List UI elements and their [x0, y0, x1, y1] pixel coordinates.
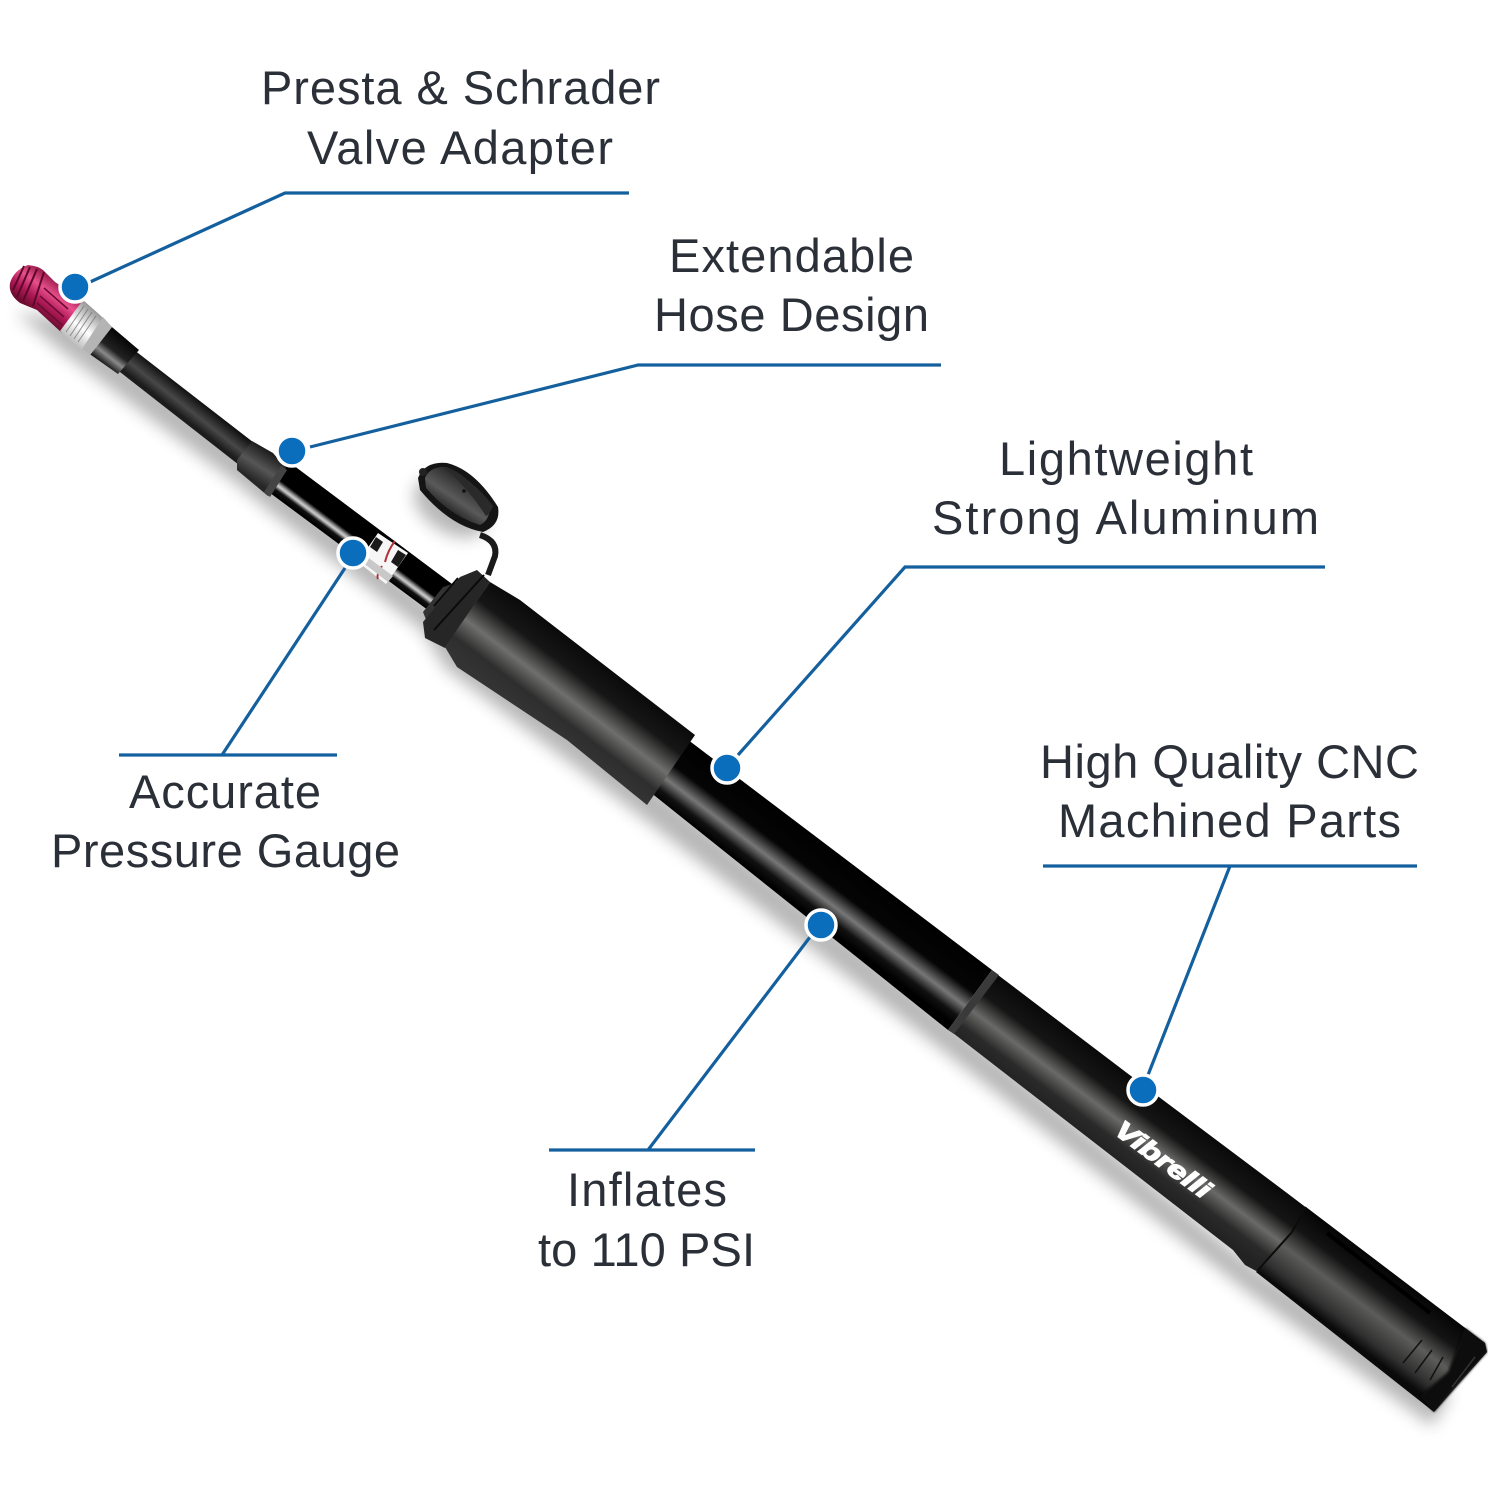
leader line: valve adapter [90, 193, 629, 282]
dust cap strap [480, 535, 495, 575]
label: 110 PSI [538, 1163, 755, 1276]
label: extendable hose: Extendable [669, 229, 914, 282]
handle grip [445, 582, 695, 805]
end cap [1256, 1207, 1487, 1412]
leader line: lightweight aluminum [738, 567, 1325, 755]
callout: 110 PSI [538, 910, 836, 1276]
label: valve adapter [261, 61, 660, 174]
label: extendable hose: Hose Design [654, 288, 929, 341]
top flange rings [423, 570, 490, 648]
callout: extendable hose [277, 229, 941, 466]
label: 110 PSI: Inflates [567, 1163, 727, 1216]
marker dot: lightweight aluminum [712, 753, 742, 783]
label: extendable hose [654, 229, 929, 341]
pump illustration [10, 265, 1487, 1412]
label: pressure gauge: Accurate [129, 765, 321, 818]
label: pressure gauge: Pressure Gauge [51, 824, 400, 877]
label: lightweight aluminum: Lightweight [999, 432, 1253, 485]
callout: lightweight aluminum [712, 432, 1325, 783]
label: valve adapter: Valve Adapter [307, 121, 613, 174]
lower pump body [953, 975, 1312, 1272]
leader line: CNC parts [1043, 866, 1417, 1075]
callout: CNC parts [1040, 735, 1419, 1105]
label: lightweight aluminum: Strong Aluminum [932, 491, 1319, 544]
leader line: 110 PSI [549, 937, 810, 1150]
marker dot: pressure gauge [338, 538, 368, 568]
label: valve adapter: Presta & Schrader [261, 61, 660, 114]
valve adapter: red threaded head [10, 265, 85, 333]
telescoping upper tube [262, 459, 460, 622]
marker dot: extendable hose [277, 436, 307, 466]
lower aluminium shaft [635, 730, 992, 1030]
leader line: extendable hose [310, 365, 941, 447]
callout: pressure gauge [51, 538, 400, 877]
soft shadow beneath pump [16, 312, 1450, 1426]
knurled shaft collar [948, 970, 999, 1034]
label: lightweight aluminum [932, 432, 1319, 544]
hose end sleeve [84, 322, 139, 374]
valve adapter: silver knurled collar [60, 300, 112, 355]
label: 110 PSI: to 110 PSI [538, 1223, 755, 1276]
leader line: pressure gauge [119, 568, 345, 755]
label: CNC parts: Machined Parts [1058, 794, 1401, 847]
dust cap [418, 463, 498, 532]
pressure gauge band [358, 533, 408, 584]
brand logo: Vibrelli [1109, 1115, 1217, 1205]
label: CNC parts: High Quality CNC [1040, 735, 1419, 788]
callout: Presta and Schrader valve adapter [60, 61, 660, 302]
marker dot: valve adapter [60, 272, 90, 302]
label: CNC parts [1040, 735, 1419, 847]
marker dot: CNC parts [1128, 1075, 1158, 1105]
label: pressure gauge [51, 765, 400, 877]
marker dot: 110 PSI [806, 910, 836, 940]
hose [111, 343, 262, 472]
hose joint [237, 441, 287, 497]
